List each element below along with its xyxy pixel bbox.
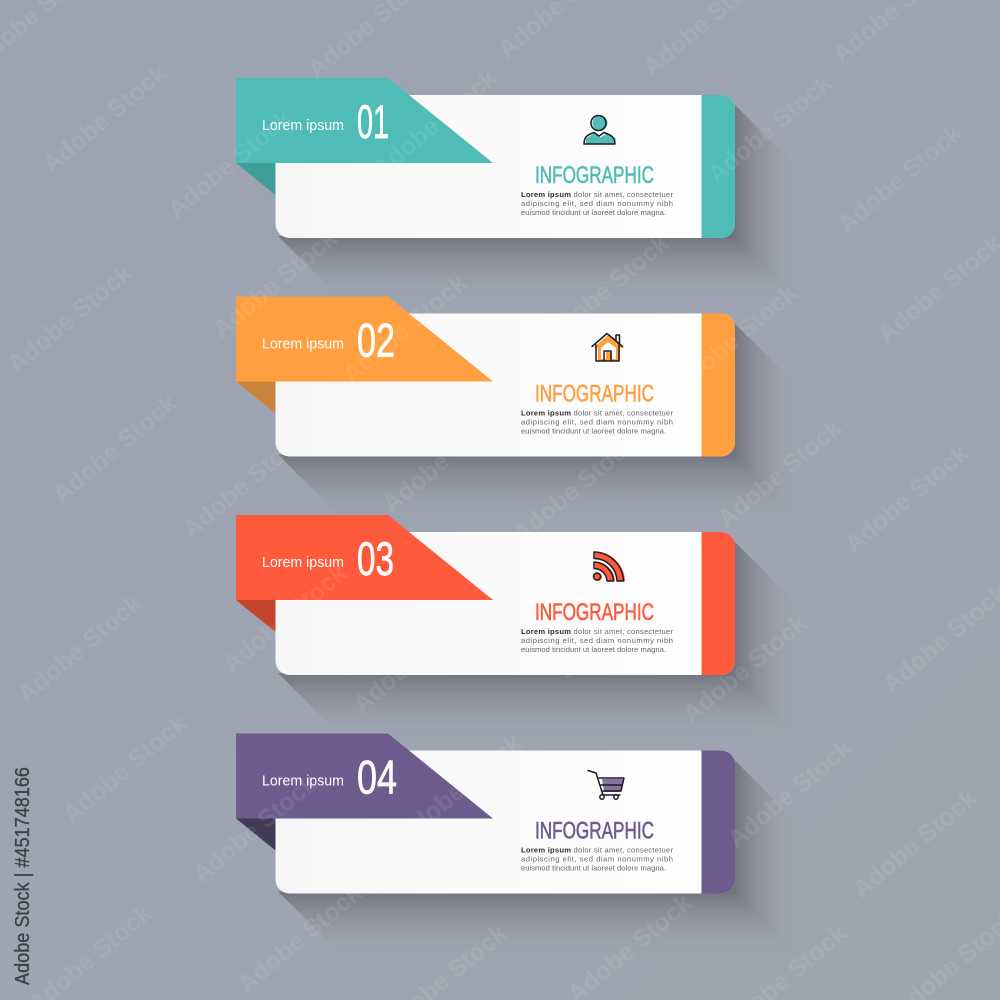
ribbon 01 [236, 78, 493, 163]
panel: card 04 [236, 734, 800, 958]
watermark overlay: Adobe Stock [722, 734, 857, 854]
watermark overlay: Adobe Stock [347, 599, 482, 719]
watermark overlay: Adobe Stock [847, 784, 982, 904]
body text 02: adipiscing elit, sed diam nonummy nibh [521, 418, 673, 426]
card body 01 [276, 95, 735, 238]
panel: card 01 [236, 78, 800, 303]
card body 02 [276, 314, 735, 456]
body text 01: adipiscing elit, sed diam nonummy nibh [521, 199, 673, 208]
body text 03: euismod tincidunt ut laoreet dolore magna. [521, 645, 666, 654]
number 03: 03 [357, 532, 394, 585]
icon: house [592, 334, 624, 362]
watermark overlay: Adobe Stock [712, 414, 847, 534]
ribbon label 03: Lorem ipsum [262, 554, 344, 571]
side band 03 [702, 532, 735, 675]
watermark overlay: Adobe Stock [177, 424, 312, 544]
number 04: 04 [357, 750, 397, 804]
long shadow 04 [278, 758, 800, 958]
long shadow 02 [278, 322, 800, 522]
heading 03: INFOGRAPHIC [535, 599, 654, 626]
heading 04: INFOGRAPHIC [535, 818, 654, 844]
ribbon fold 01 [236, 163, 276, 195]
body text 03: adipiscing elit, sed diam nonummy nibh [521, 636, 673, 645]
watermark overlay: Adobe Stock [207, 224, 342, 344]
body text 03: Lorem ipsum dolor sit amet, consectetuer [521, 627, 673, 636]
watermark overlay: Adobe Stock [2, 259, 137, 379]
ribbon fold 04 [236, 818, 276, 850]
side band 01 [702, 95, 735, 238]
watermark overlay: Adobe Stock [367, 64, 502, 184]
ribbon fold 02 [236, 382, 276, 414]
watermark overlay: Adobe Stock [337, 269, 472, 389]
watermark overlay: Adobe Stock [552, 564, 687, 684]
side band 02 [702, 314, 735, 456]
long shadow 03 [278, 540, 800, 740]
long shadow 01 [278, 103, 800, 303]
body text 01 [521, 190, 673, 217]
watermark overlay: Adobe Stock [839, 439, 974, 559]
icon: rss feed [594, 552, 625, 581]
watermark overlay: Adobe Stock [187, 769, 322, 889]
side band 04 [702, 750, 735, 894]
body text 04 [521, 846, 673, 872]
card body 04 [276, 750, 735, 894]
watermark overlay: Adobe Stock [832, 119, 967, 239]
watermark overlay: Adobe Stock [392, 729, 527, 849]
body text 02: euismod tincidunt ut laoreet dolore magna. [521, 426, 666, 436]
ribbon label 01: Lorem ipsum [262, 117, 344, 134]
icon: shopping cart [588, 770, 624, 799]
icon: person [584, 116, 616, 144]
body text 04: Lorem ipsum dolor sit amet, consectetuer [521, 846, 673, 854]
heading 01: INFOGRAPHIC [535, 162, 654, 189]
ribbon fold 03 [236, 600, 276, 632]
watermark overlay: Adobe Stock [539, 229, 674, 349]
card body 03 [276, 532, 735, 675]
heading 02: INFOGRAPHIC [535, 380, 654, 408]
body text 03 [521, 627, 673, 654]
body text 01: euismod tincidunt ut laoreet dolore magna. [521, 208, 666, 217]
watermark overlay: Adobe Stock [507, 429, 642, 549]
watermark overlay: Adobe Stock [12, 589, 147, 709]
watermark overlay: Adobe Stock [677, 609, 812, 729]
stock id vertical label: Adobe Stock | #451748166 [12, 767, 34, 985]
watermark overlay: Adobe Stock [37, 59, 172, 179]
body text 04: adipiscing elit, sed diam nonummy nibh [521, 854, 673, 864]
number 01: 01 [357, 95, 389, 148]
body text 02 [521, 408, 673, 436]
ribbon 03 [236, 515, 493, 600]
watermark overlay: Adobe Stock [57, 709, 192, 829]
number 02: 02 [357, 314, 395, 366]
ribbon 02 [236, 296, 493, 382]
panel: card 02 [236, 296, 800, 522]
ribbon label 04: Lorem ipsum [262, 772, 344, 790]
watermark overlay: Adobe Stock [667, 279, 802, 399]
watermark overlay: Adobe Stock [217, 559, 352, 679]
ribbon 04 [236, 734, 493, 818]
ribbon label 02: Lorem ipsum [262, 336, 344, 352]
watermark overlay: Adobe Stock [377, 399, 512, 519]
watermark overlay: Adobe Stock [47, 389, 182, 509]
panel: card 03 [236, 515, 800, 740]
watermark overlay: Adobe Stock [162, 104, 297, 224]
body text 04: euismod tincidunt ut laoreet dolore magna. [521, 864, 666, 872]
watermark overlay: Adobe Stock [702, 69, 837, 189]
body text 01: Lorem ipsum dolor sit amet, consectetuer [521, 190, 673, 199]
watermark overlay: Adobe Stock [232, 879, 367, 999]
body text 02: Lorem ipsum dolor sit amet, consectetuer [521, 408, 673, 418]
